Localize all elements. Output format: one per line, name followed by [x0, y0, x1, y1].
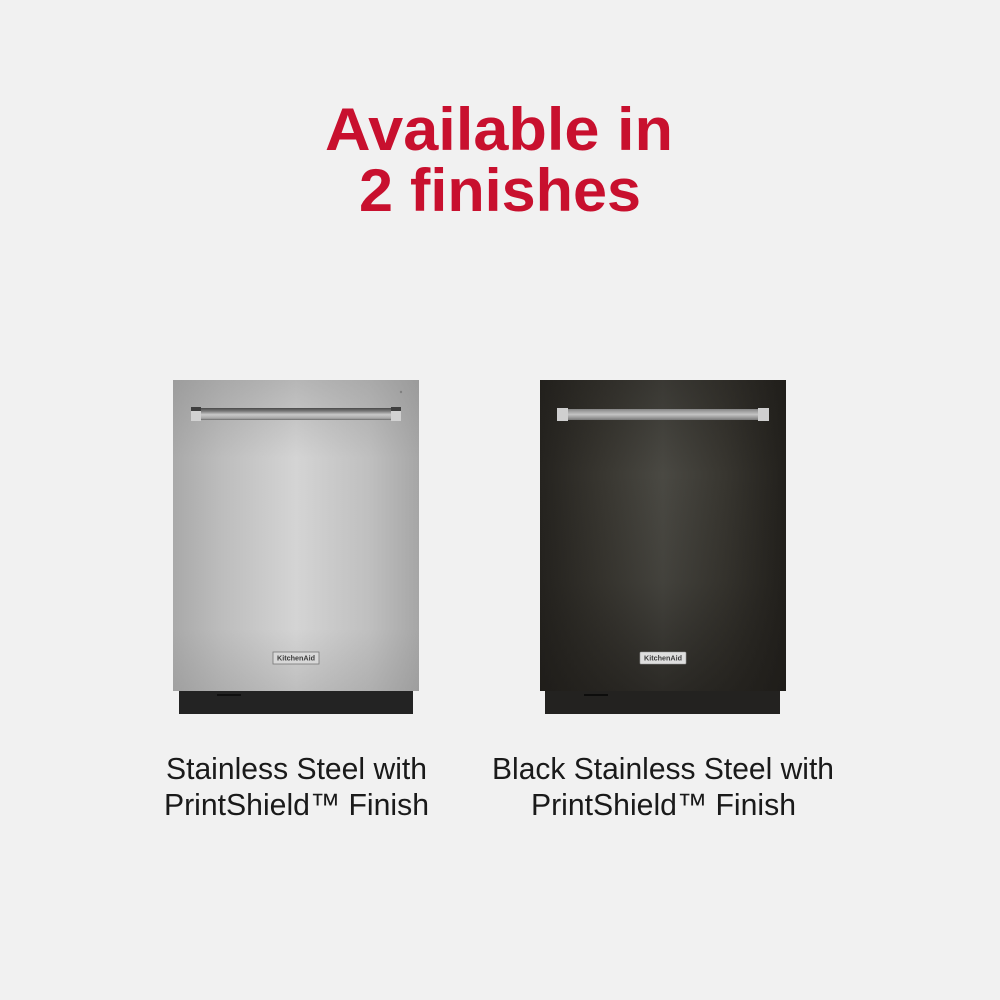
door handle	[557, 408, 769, 421]
KitchenAid badge: KitchenAid	[277, 654, 315, 662]
title	[325, 96, 673, 224]
door latch	[217, 694, 241, 696]
toe kick	[179, 691, 413, 714]
KitchenAid badge	[273, 652, 319, 664]
caption: black stainless steel: Black Stainless Steel with	[492, 751, 834, 786]
product: black stainless dishwasher	[540, 380, 786, 714]
caption: stainless steel: Stainless Steel with	[166, 751, 427, 786]
KitchenAid badge: KitchenAid	[644, 654, 682, 662]
toe kick	[545, 691, 780, 714]
door latch	[584, 694, 608, 696]
KitchenAid badge	[640, 652, 686, 664]
indicator light	[400, 391, 402, 393]
caption: stainless steel	[164, 751, 429, 822]
door panel	[173, 380, 419, 691]
door panel	[540, 380, 786, 691]
title: 2 finishes	[359, 157, 641, 224]
caption: black stainless steel	[492, 751, 834, 822]
caption: stainless steel: PrintShield™ Finish	[164, 787, 429, 822]
caption: black stainless steel: PrintShield™ Finish	[531, 787, 796, 822]
door handle	[191, 407, 401, 421]
title: Available in	[325, 96, 673, 163]
product: stainless steel dishwasher	[173, 380, 419, 714]
